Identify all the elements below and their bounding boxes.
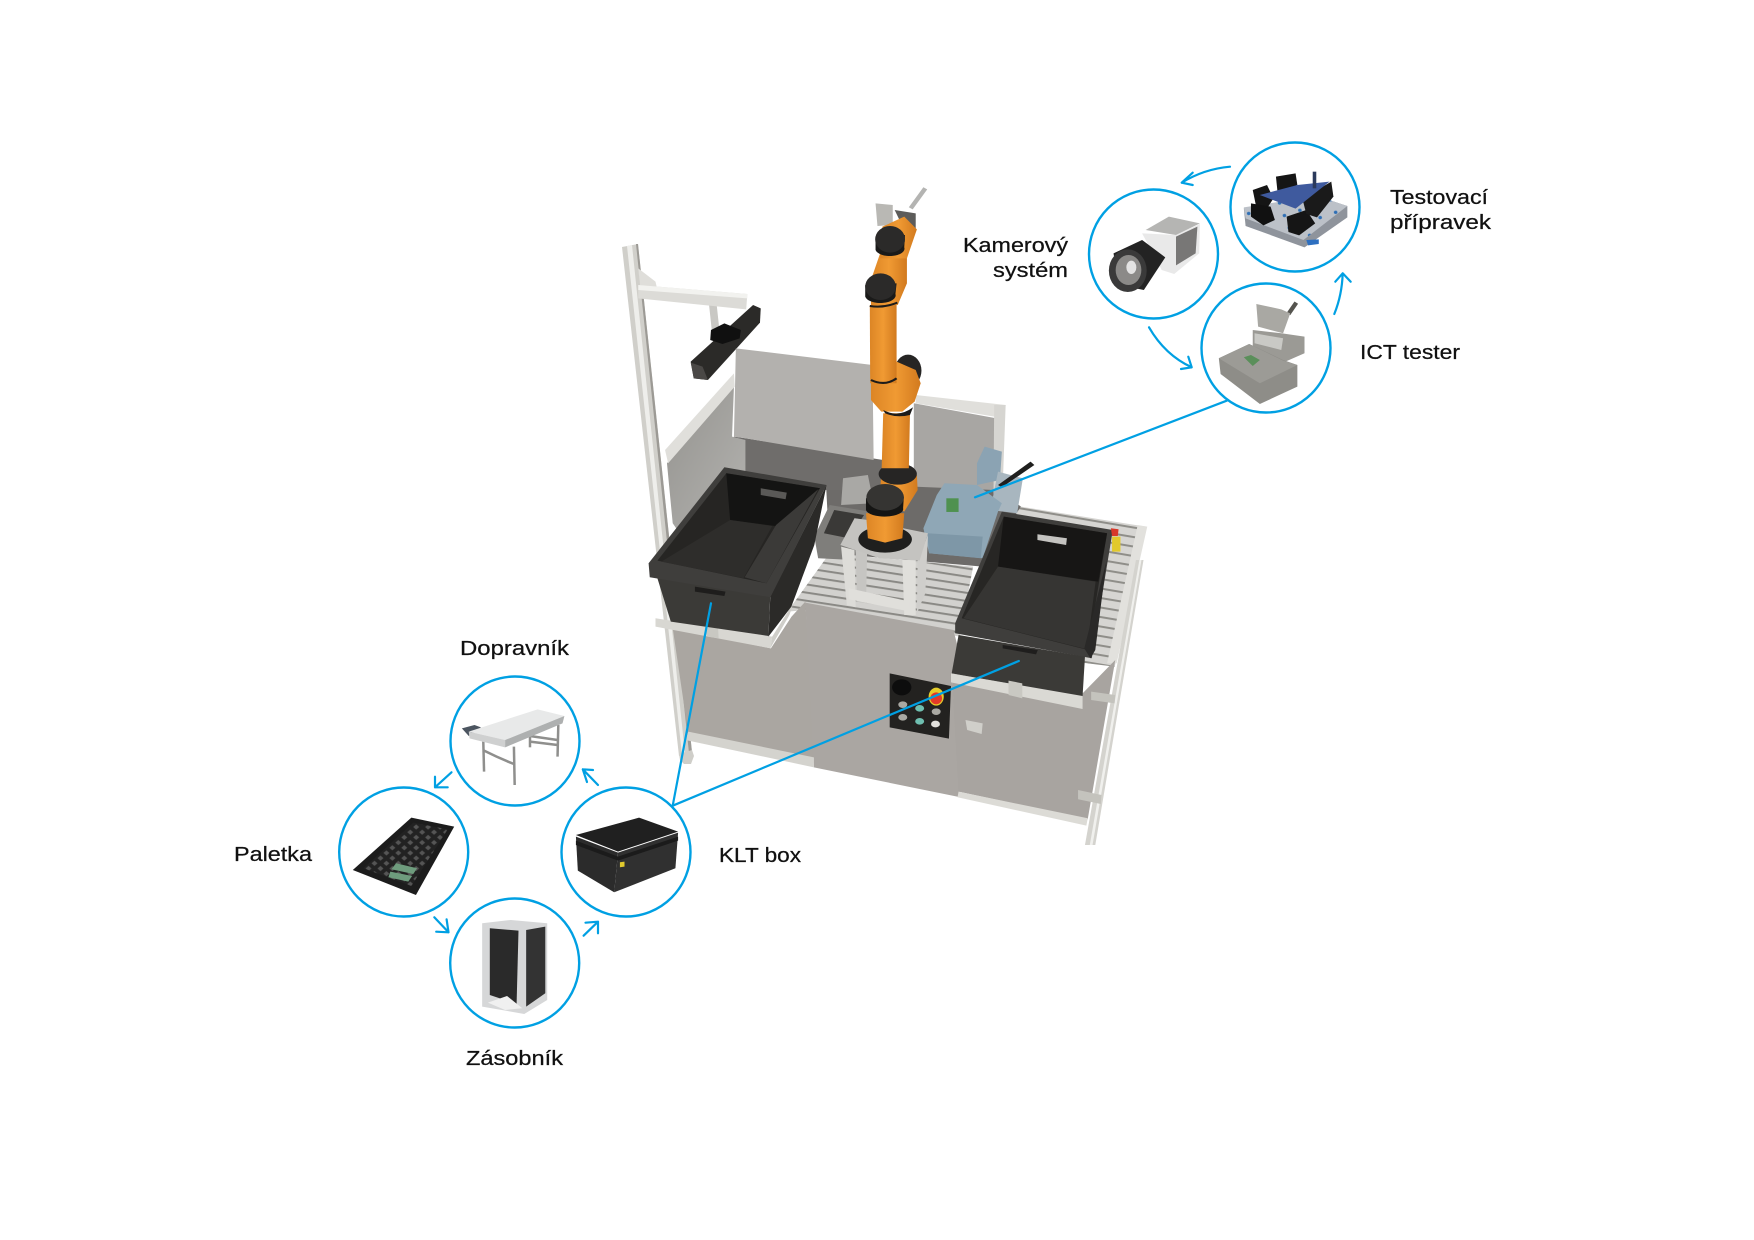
circle: KLT box — [562, 788, 690, 916]
arrow: Testovací přípravek to Kamerový systém — [1182, 167, 1230, 185]
label: Paletka: Paletka — [234, 844, 313, 866]
back panels and side panel — [665, 348, 1021, 567]
label: Dopravník: Dopravník — [460, 638, 570, 660]
arrow: Zásobník to KLT box — [584, 922, 598, 936]
circle: ICT tester — [1202, 284, 1330, 412]
label: KLT box: KLT box — [719, 845, 801, 867]
right KLT box on machine — [951, 512, 1120, 709]
circle: Testovací přípravek — [1230, 142, 1360, 272]
arrow: ICT tester to Testovací přípravek — [1334, 273, 1351, 314]
front panels and doors — [673, 560, 1144, 845]
control panel — [890, 673, 951, 739]
label: Kamerový systém: systém — [993, 260, 1068, 282]
label: Testovací přípravek: přípravek — [1390, 212, 1492, 234]
connector line: KLT box to right box — [673, 661, 1019, 806]
label: Testovací přípravek — [1390, 187, 1492, 234]
robot stand — [840, 518, 928, 615]
conveyor deck — [788, 475, 1147, 667]
arrow: Kamerový systém to ICT tester — [1149, 327, 1192, 369]
circle: Zásobník — [450, 898, 579, 1028]
arrow: Dopravník to Paletka — [435, 772, 452, 787]
label: Kamerový systém: Kamerový — [963, 235, 1068, 257]
machine: robotic cell — [622, 188, 1147, 845]
circle: Dopravník — [450, 676, 580, 806]
robot arm — [865, 188, 925, 543]
panel: logistics cycle — [234, 638, 801, 1070]
connector line: KLT box to left box — [673, 603, 711, 806]
left aluminium post — [622, 244, 694, 764]
left KLT box on machine — [649, 467, 827, 648]
label: Zásobník: Zásobník — [466, 1048, 564, 1070]
circle: Kamerový systém — [1089, 190, 1218, 318]
overhead camera bracket and bar — [638, 268, 761, 380]
label: Kamerový systém — [963, 235, 1068, 282]
panel: testing station cycle — [963, 142, 1492, 412]
arrow: Paletka to Zásobník — [434, 917, 448, 932]
label: Testovací přípravek: Testovací — [1390, 187, 1489, 209]
circle: Paletka — [339, 788, 468, 916]
connector line: ICT tester to machine — [975, 401, 1227, 497]
arrow: KLT box to Dopravník — [583, 769, 598, 785]
label: ICT tester: ICT tester — [1360, 342, 1460, 364]
test fixture on machine — [923, 447, 1034, 558]
